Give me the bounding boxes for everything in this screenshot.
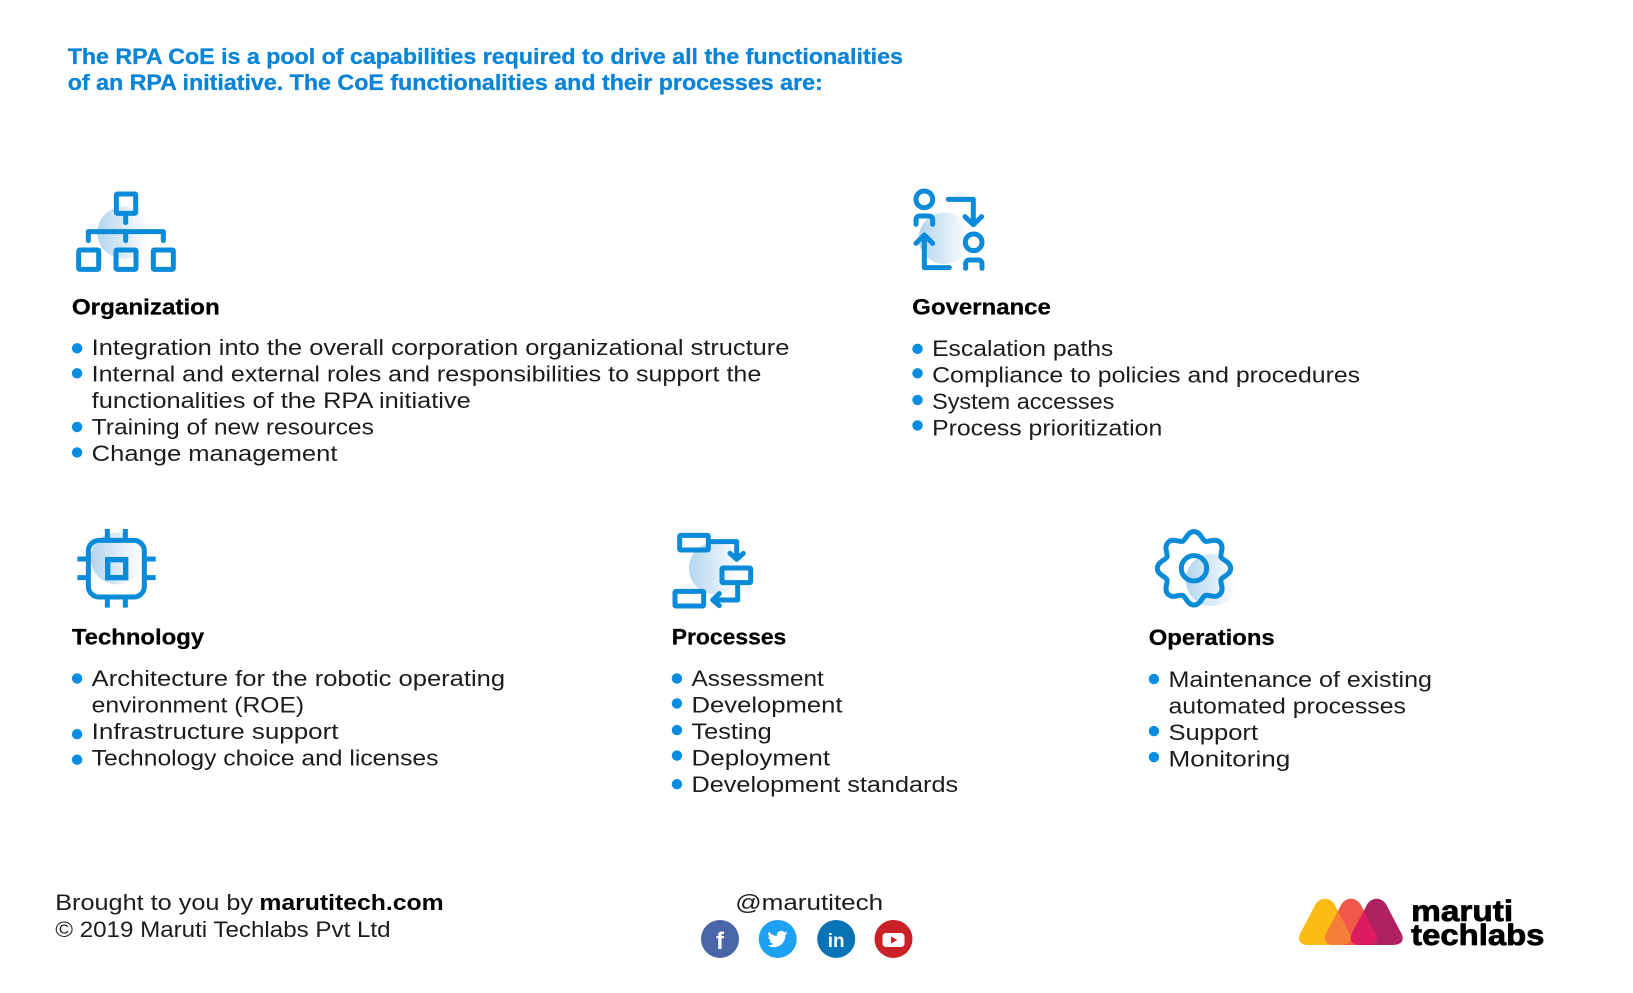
list: governance items: Process prioritization xyxy=(932,415,1162,440)
list: organization items: Integration into the overall corporation organizational structure xyxy=(92,335,789,360)
icon: gear xyxy=(1157,532,1238,606)
title: of an RPA initiative. The CoE functionalities and their processes are: xyxy=(68,70,823,95)
list: technology items: Infrastructure support xyxy=(92,719,339,744)
heading: governance: Governance xyxy=(912,295,1051,320)
list: processes items: Development xyxy=(692,692,843,717)
list: operations items: Maintenance of existing xyxy=(1169,667,1432,692)
list: operations items: Monitoring xyxy=(1169,746,1290,771)
panel: operations xyxy=(1149,532,1432,771)
heading: technology: Technology xyxy=(72,625,205,650)
list: organization items xyxy=(72,335,789,466)
panel: technology xyxy=(72,529,505,770)
footer credit: marutitech.com xyxy=(259,890,444,915)
icon: governance people and arrows xyxy=(916,191,982,268)
icon: facebook xyxy=(701,920,739,958)
icon: linkedin: in xyxy=(828,931,845,952)
panel: processes xyxy=(672,535,958,797)
footer credit: Brought to you by xyxy=(55,890,254,915)
list: technology items: Technology choice and licenses xyxy=(92,745,438,770)
icon: facebook: f xyxy=(716,928,725,955)
title xyxy=(68,44,903,95)
heading: organization: Organization xyxy=(72,295,220,320)
list: organization items: Internal and external roles and responsibilities to support the xyxy=(92,362,761,387)
list: governance items xyxy=(912,336,1360,440)
panel: organization xyxy=(72,194,789,466)
list: governance items: Compliance to policies and procedures xyxy=(932,363,1360,388)
list: processes items: Assessment xyxy=(692,666,825,691)
icon: process flow xyxy=(675,535,751,606)
list: governance items: System accesses xyxy=(932,389,1114,414)
list: organization items: functionalities of the RPA initiative xyxy=(92,388,471,413)
icon: twitter xyxy=(759,920,797,958)
list: processes items xyxy=(672,666,958,797)
heading: processes: Processes xyxy=(672,625,786,650)
list: governance items: Escalation paths xyxy=(932,336,1113,361)
icon: microchip xyxy=(77,529,156,608)
heading: operations: Operations xyxy=(1149,625,1275,650)
list: processes items: Deployment xyxy=(692,745,831,770)
icon: linkedin xyxy=(817,920,855,958)
logo mark xyxy=(1299,899,1403,945)
logo wordmark xyxy=(1411,896,1544,952)
title: The RPA CoE is a pool of capabilities required to drive all the functionalities xyxy=(68,44,903,69)
list: operations items: automated processes xyxy=(1169,693,1406,718)
list: processes items: Development standards xyxy=(692,772,958,797)
list: technology items xyxy=(72,666,505,770)
list: operations items xyxy=(1149,667,1432,771)
logo wordmark: maruti xyxy=(1411,896,1513,928)
logo wordmark: techlabs xyxy=(1411,920,1544,952)
footer credit xyxy=(55,890,444,942)
social icons xyxy=(701,920,913,958)
panel: governance xyxy=(912,191,1360,440)
social handle: @marutitech xyxy=(735,890,883,915)
logo: maruti techlabs xyxy=(1298,898,1544,946)
list: technology items: environment (ROE) xyxy=(92,692,304,717)
icon: organization chart xyxy=(79,194,173,269)
footer credit: © 2019 Maruti Techlabs Pvt Ltd xyxy=(55,917,391,942)
list: technology items: Architecture for the robotic operating xyxy=(92,666,505,691)
list: organization items: Change management xyxy=(92,441,338,466)
list: operations items: Support xyxy=(1169,720,1259,745)
list: processes items: Testing xyxy=(692,719,772,744)
icon: youtube xyxy=(875,920,913,958)
list: organization items: Training of new resources xyxy=(92,414,374,439)
